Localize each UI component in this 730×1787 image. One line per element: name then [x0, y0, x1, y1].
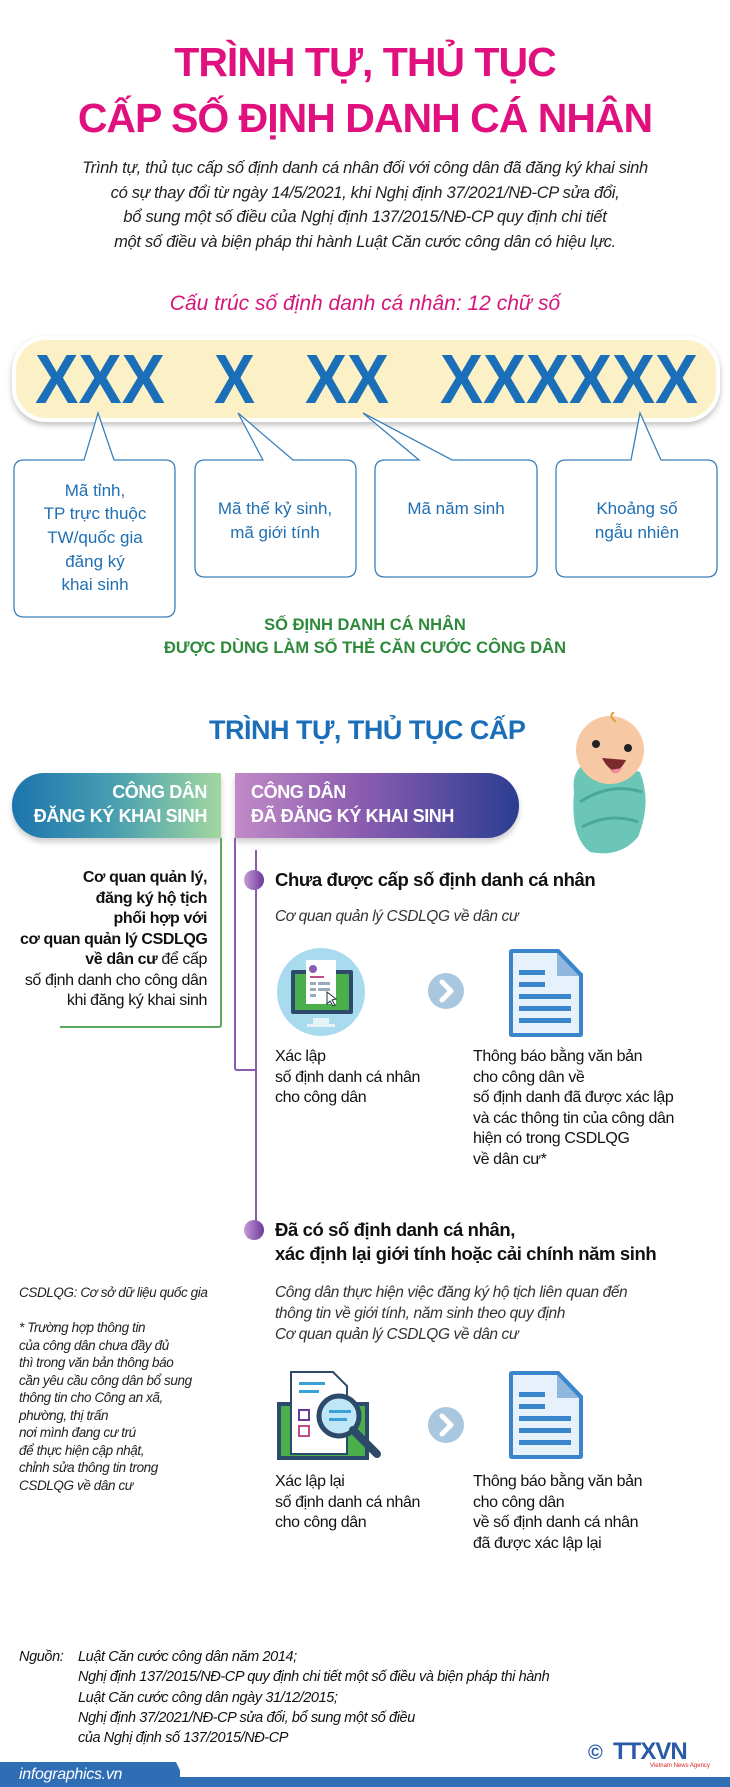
left text block: về dân cư để cấp — [85, 951, 207, 968]
text: notify again: Thông báo bằng văn bản — [473, 1473, 642, 1490]
green note: ĐƯỢC DÙNG LÀM SỐ THẺ CĂN CƯỚC CÔNG DÂN — [164, 639, 566, 657]
subtitle: Cấu trúc số định danh cá nhân: 12 chữ số — [170, 292, 560, 315]
icon: document 2 — [509, 1371, 583, 1459]
callout: birth year: Mã năm sinh — [407, 499, 505, 518]
text: notify: số định danh đã được xác lập — [473, 1089, 673, 1106]
green note — [164, 615, 566, 657]
notes: chỉnh sửa thông tin trong — [19, 1460, 158, 1475]
number bar — [12, 336, 720, 422]
left text block: số định danh cho công dân — [25, 972, 207, 988]
callout: province code: đăng ký — [65, 552, 125, 571]
notes: nơi mình đang cư trú — [19, 1425, 136, 1440]
title — [78, 39, 652, 141]
number bar: X — [214, 340, 255, 418]
icon: magnifier document — [277, 1371, 381, 1460]
sources: Luật Căn cước công dân ngày 31/12/2015; — [78, 1690, 338, 1706]
notes: CSDLQG về dân cư — [19, 1478, 133, 1492]
callout: birth year — [363, 413, 537, 577]
number bar: XX — [305, 340, 389, 418]
pill: citizen registering birth — [12, 773, 221, 838]
callout: province code — [14, 413, 175, 617]
text: re-establish: Xác lập lại — [275, 1473, 344, 1490]
structure diagram — [9, 340, 723, 618]
left text block: phối hợp với — [114, 910, 207, 927]
left text block: cơ quan quản lý CSDLQG — [20, 930, 207, 948]
text: notify again: về số định danh cá nhân — [473, 1514, 638, 1531]
notes: để thực hiện cập nhật, — [19, 1442, 144, 1458]
left text block — [20, 869, 207, 1009]
text: re-establish: số định danh cá nhân — [275, 1494, 420, 1510]
callout: century/gender — [195, 413, 356, 577]
text: notify — [473, 1047, 674, 1168]
sources: Nghị định 137/2015/NĐ-CP quy định chi tiết một số điều và biện pháp thi hành — [78, 1669, 549, 1685]
text: notify: và các thông tin của công dân — [473, 1110, 674, 1126]
intro text: một số điều và biện pháp thi hành Luật Căn cước công dân có hiệu lực. — [114, 233, 616, 251]
pill: citizen already registered: CÔNG DÂN — [251, 782, 346, 802]
text: notify: Thông báo bằng văn bản — [473, 1048, 642, 1065]
heading: already issued: xác định lại giới tính hoặc cải chính năm sinh — [275, 1242, 656, 1264]
arrow 1 — [428, 973, 464, 1009]
text: re-establish — [275, 1473, 420, 1531]
notes: * Trường hợp thông tin — [19, 1320, 145, 1335]
intro text — [82, 159, 648, 251]
notes: phường, thị trấn — [19, 1408, 108, 1422]
icon: baby — [573, 712, 646, 854]
number bar: XXX — [35, 340, 165, 418]
sources — [19, 1649, 549, 1746]
text: re-establish: cho công dân — [275, 1514, 366, 1531]
notes: CSDLQG: Cơ sở dữ liệu quốc gia — [19, 1285, 207, 1300]
text: establish id: số định danh cá nhân — [275, 1068, 420, 1086]
bullet dot 1 — [244, 870, 264, 890]
callout: random: ngẫu nhiên — [595, 523, 679, 542]
callout: century/gender: Mã thế kỷ sinh, — [218, 499, 332, 518]
text: establish id: Xác lập — [275, 1048, 326, 1065]
arrow 2 — [428, 1407, 464, 1443]
left text block: đăng ký hộ tịch — [96, 890, 207, 906]
callout: random: Khoảng số — [596, 499, 678, 518]
subtext 2: Cơ quan quản lý CSDLQG về dân cư — [275, 1326, 518, 1343]
subtext 1: Cơ quan quản lý CSDLQG về dân cư — [275, 908, 518, 925]
notes: thông tin cho Công an xã, — [19, 1390, 163, 1405]
notes: thì trong văn bản thông báo — [19, 1355, 173, 1370]
footer — [0, 1762, 730, 1787]
callout: province code: TP trực thuộc — [44, 504, 147, 523]
text: notify: hiện có trong CSDLQG — [473, 1130, 630, 1147]
text: establish id: cho công dân — [275, 1089, 366, 1106]
intro text: Trình tự, thủ tục cấp số định danh cá nhân đối với công dân đã đăng ký khai sinh — [82, 159, 648, 177]
heading: already issued — [275, 1219, 656, 1264]
bullet dot 2 — [244, 1220, 264, 1240]
notes: cần yêu cầu công dân bổ sung — [19, 1372, 192, 1388]
notes — [18, 1285, 208, 1492]
sources: Nghị định 37/2021/NĐ-CP sửa đổi, bổ sung một số điều — [78, 1710, 415, 1726]
title: TRÌNH TỰ, THỦ TỤC — [174, 39, 556, 85]
text: notify: về dân cư* — [473, 1150, 546, 1168]
sources: của Nghị định số 137/2015/NĐ-CP — [78, 1730, 288, 1746]
notes: của công dân chưa đầy đủ — [19, 1338, 169, 1352]
callout: province code: TW/quốc gia — [47, 528, 143, 547]
pill: citizen already registered — [235, 773, 519, 838]
callout: random — [556, 413, 717, 577]
icon: document 1 — [509, 949, 583, 1037]
heading: not yet issued: Chưa được cấp số định danh cá nhân — [275, 869, 595, 890]
text: establish id — [275, 1048, 420, 1106]
text: notify again — [473, 1472, 642, 1552]
callout: province code: khai sinh — [61, 575, 129, 594]
text: notify again: cho công dân — [473, 1494, 564, 1510]
green note: SỐ ĐỊNH DANH CÁ NHÂN — [264, 616, 466, 634]
heading: already issued: Đã có số định danh cá nhân, — [275, 1219, 515, 1240]
callout: province code: Mã tỉnh, — [65, 481, 125, 500]
subtext 2: thông tin về giới tính, năm sinh theo quy định — [275, 1305, 565, 1322]
text: notify again: đã được xác lập lại — [473, 1534, 601, 1552]
logo: Vietnam News Agency — [650, 1763, 710, 1769]
logo: TTXVN — [613, 1738, 687, 1765]
subtext 2: Công dân thực hiện việc đăng ký hộ tịch liên quan đến — [275, 1284, 627, 1301]
left text block: khi đăng ký khai sinh — [67, 992, 207, 1009]
pill: citizen already registered: ĐÃ ĐĂNG KÝ KHAI SINH — [251, 806, 454, 826]
pill: citizen registering birth: CÔNG DÂN — [112, 782, 207, 802]
title: CẤP SỐ ĐỊNH DANH CÁ NHÂN — [78, 95, 652, 141]
section heading: TRÌNH TỰ, THỦ TỤC CẤP — [209, 715, 525, 745]
icon: computer form — [277, 948, 365, 1036]
logo — [588, 1738, 710, 1769]
subtext 2 — [275, 1284, 627, 1343]
sources: Luật Căn cước công dân năm 2014; — [78, 1649, 297, 1665]
callout: century/gender: mã giới tính — [230, 523, 320, 542]
intro text: bổ sung một số điều của Nghị định 137/2015/NĐ-CP quy định chi tiết — [123, 208, 607, 226]
sources: Nguồn: — [19, 1649, 63, 1665]
intro text: có sự thay đổi từ ngày 14/5/2021, khi Nghị định 37/2021/NĐ-CP sửa đổi, — [111, 184, 619, 202]
left text block: Cơ quan quản lý, — [83, 869, 207, 886]
footer: infographics.vn — [19, 1766, 122, 1783]
connector lines — [60, 838, 257, 1220]
pill: citizen registering birth: ĐĂNG KÝ KHAI SINH — [34, 806, 207, 826]
text: notify: cho công dân về — [473, 1068, 584, 1086]
number bar: XXXXXX — [440, 340, 698, 418]
logo: © — [588, 1742, 603, 1764]
